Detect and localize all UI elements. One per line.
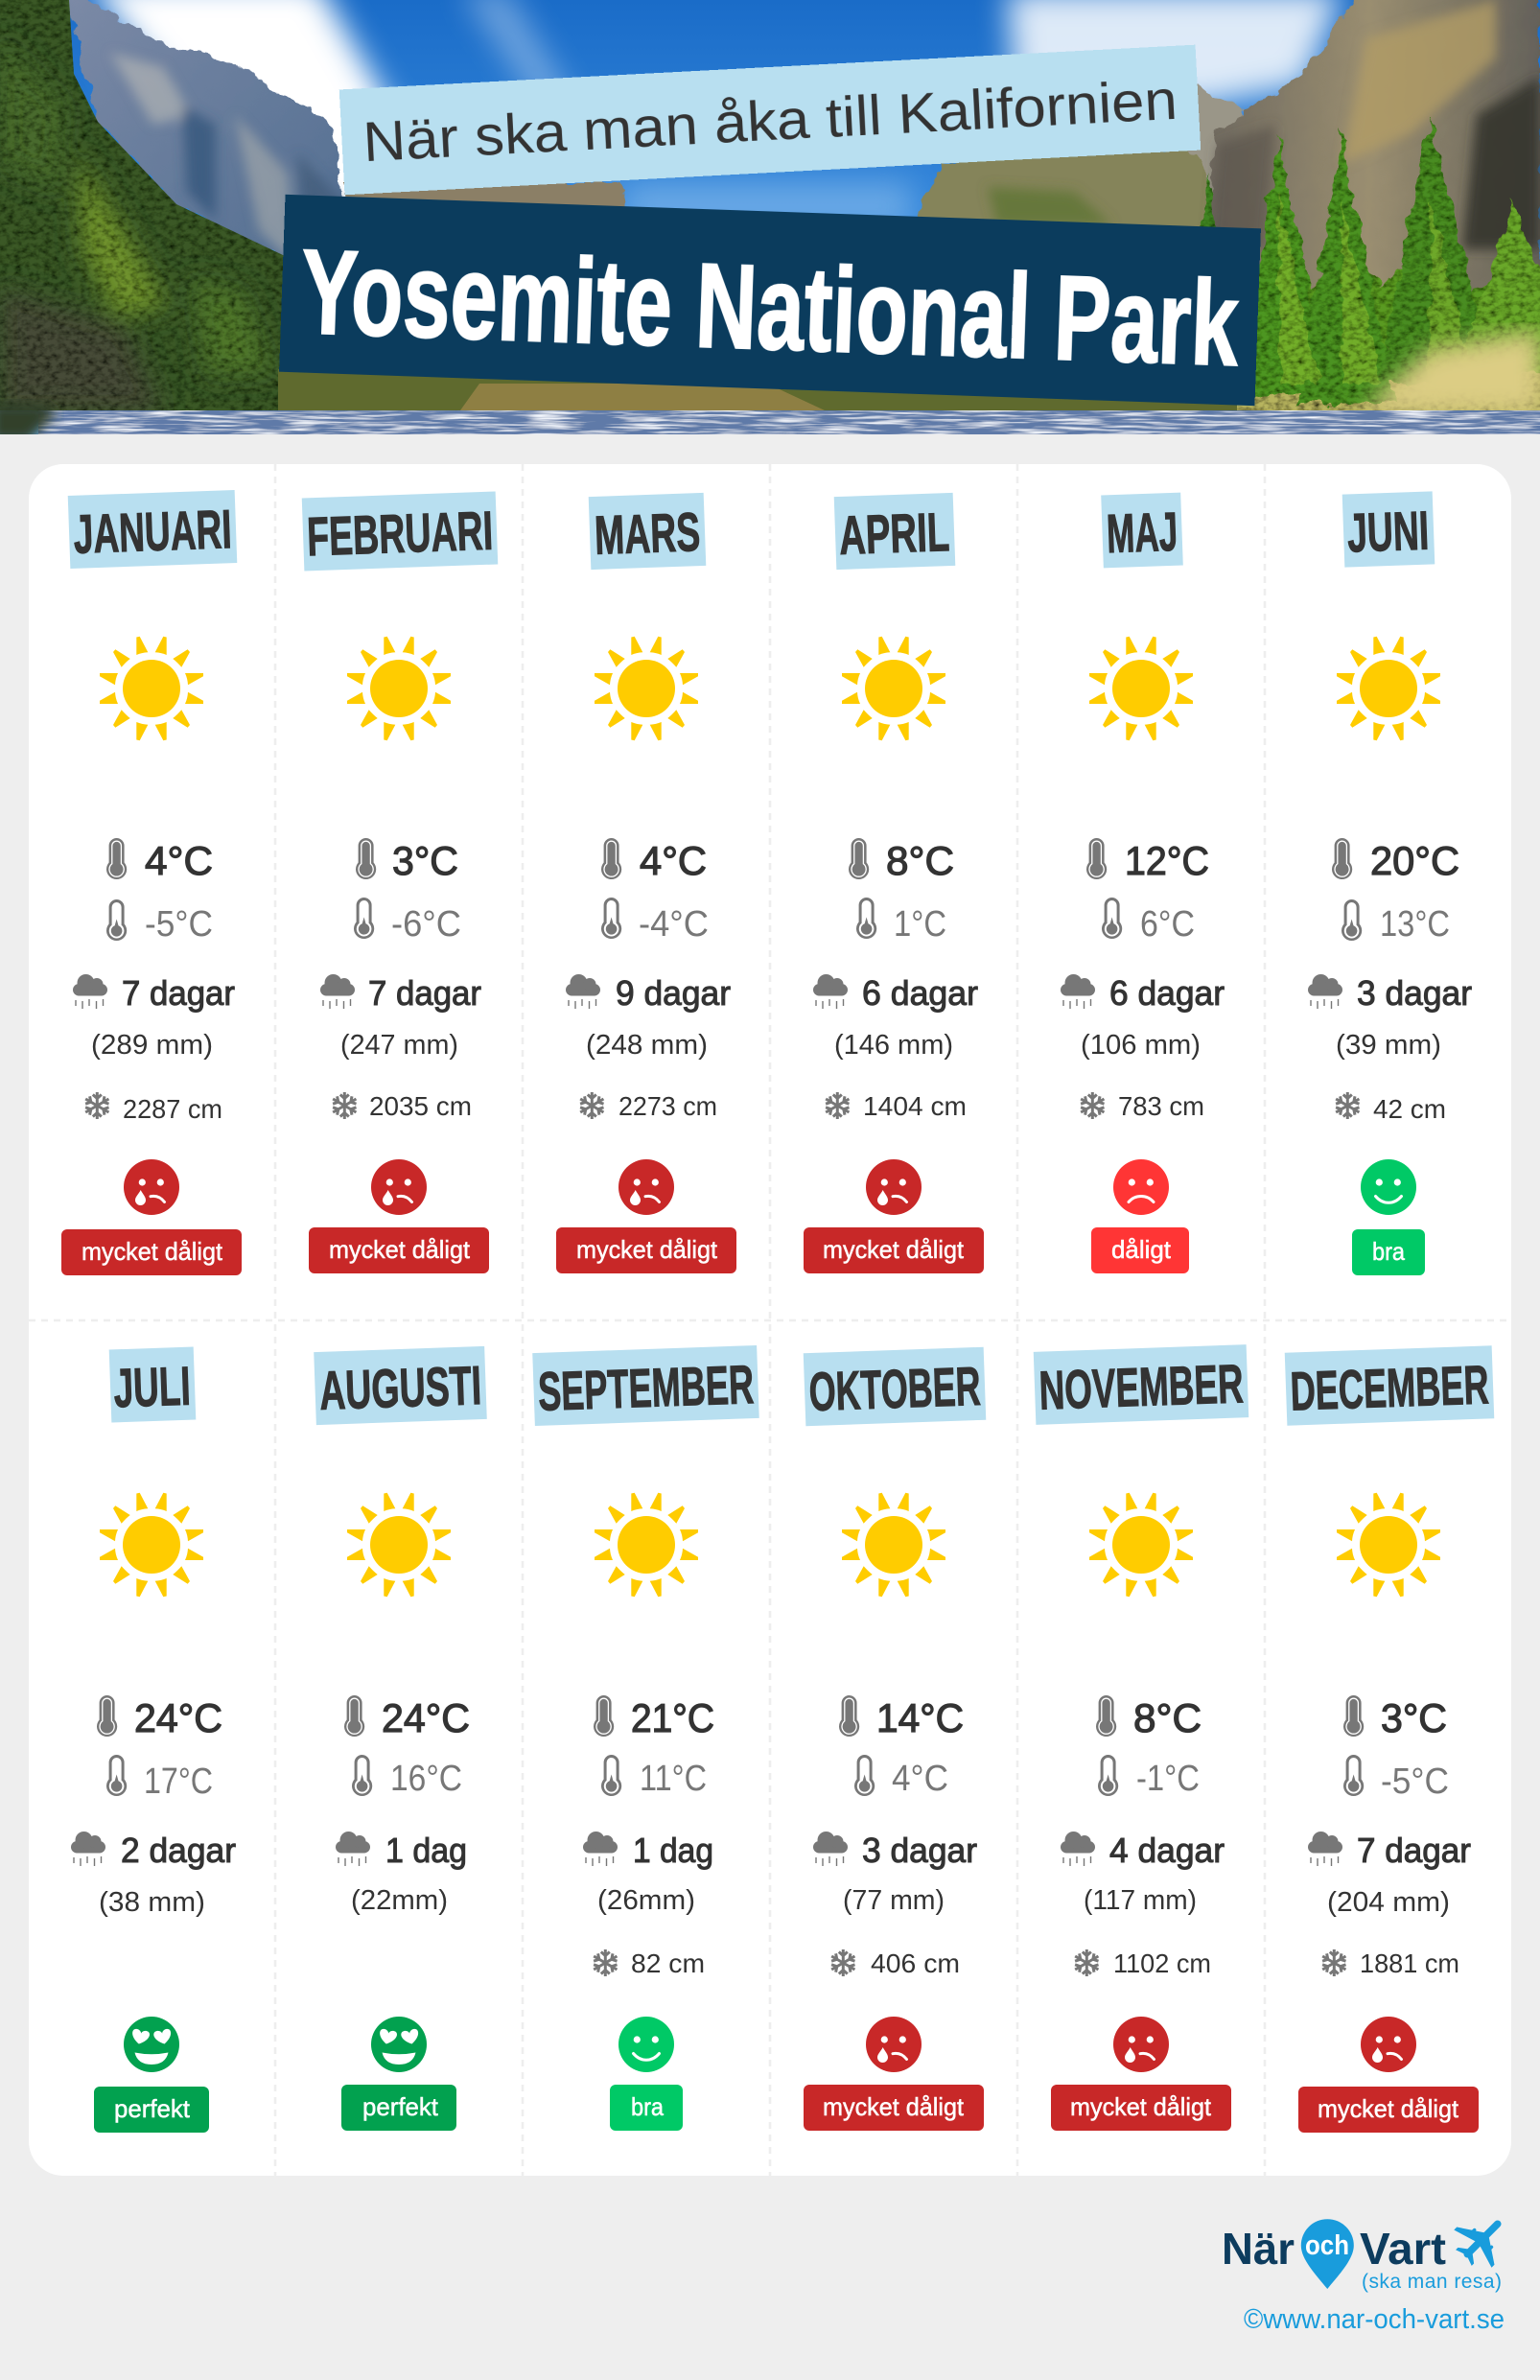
min temperature <box>352 1755 462 1799</box>
logo: När och Vart: När <box>1222 2224 1295 2274</box>
snowfall: 1881 cm <box>1360 1948 1459 1978</box>
snowfall <box>1334 1092 1446 1124</box>
snowfall <box>83 1092 222 1124</box>
logo: När och Vart <box>1222 2203 1519 2293</box>
rating badge <box>1298 2087 1479 2133</box>
month: Oktober <box>804 1347 986 2131</box>
icon: heart-eyes face <box>124 2017 179 2072</box>
rating badge <box>1051 2085 1231 2131</box>
rain days: 6 dagar <box>862 973 978 1013</box>
rating badge <box>341 2085 456 2131</box>
rain days: 7 dagar <box>368 973 481 1013</box>
month label <box>68 490 237 569</box>
month: Juni <box>1308 491 1472 1275</box>
rain days: 3 dagar <box>1357 973 1472 1013</box>
min temperature <box>856 898 946 945</box>
max temperature <box>601 838 707 883</box>
rainfall: (289 mm) <box>91 1030 213 1061</box>
month label: MAJ <box>1106 502 1178 565</box>
title band <box>279 195 1261 406</box>
icon: sun <box>100 637 203 740</box>
rating badge: mycket dåligt <box>823 2092 965 2121</box>
month: Augusti <box>314 1346 487 2131</box>
icon: sad face <box>1113 1159 1169 1215</box>
meadow behind the river <box>278 369 1237 410</box>
month label: APRIL <box>838 502 950 567</box>
snowfall <box>1073 1948 1211 1978</box>
month: Juli <box>71 1346 236 2133</box>
month label <box>1034 1344 1248 1425</box>
rain days <box>71 1831 236 1870</box>
rainfall: (39 mm) <box>1336 1030 1441 1061</box>
month label: JANUARI <box>73 499 233 566</box>
icon: map pin <box>1301 2219 1354 2289</box>
max temperature: 14°C <box>876 1695 964 1740</box>
max temperature <box>849 838 954 883</box>
rain days <box>1061 973 1225 1013</box>
icon: sun <box>842 637 945 740</box>
max temperature <box>594 1695 714 1740</box>
month: Januari <box>61 490 242 1275</box>
max temperature: 8°C <box>886 838 954 883</box>
rating badge <box>1091 1227 1189 1273</box>
min temperature <box>106 899 213 945</box>
rainfall: (77 mm) <box>843 1885 945 1916</box>
snowfall <box>592 1948 705 1978</box>
rain days <box>320 973 481 1013</box>
min temperature <box>106 1755 213 1802</box>
icon: airplane <box>1445 2203 1519 2276</box>
panel: monthly climate table <box>29 464 1511 2176</box>
rainfall: (117 mm) <box>1084 1885 1197 1916</box>
max temperature <box>1096 1695 1202 1740</box>
snowfall <box>829 1948 960 1978</box>
max temperature: 8°C <box>1133 1695 1202 1740</box>
rating badge: mycket dåligt <box>329 1235 471 1264</box>
icon: crying face <box>1113 2017 1169 2072</box>
min temperature: -6°C <box>391 904 461 945</box>
month: Februari <box>302 491 498 1273</box>
month label: MARS <box>594 502 701 567</box>
month label <box>834 493 955 570</box>
rain days <box>1061 1831 1225 1870</box>
rain days <box>583 1831 713 1870</box>
website credit: ©www.nar-och-vart.se <box>1244 2304 1505 2335</box>
max temperature: 4°C <box>145 838 213 883</box>
rain days: 2 dagar <box>121 1831 236 1870</box>
river <box>0 401 1540 434</box>
rating badge <box>804 1227 984 1273</box>
month label <box>532 1345 759 1426</box>
rainfall: (247 mm) <box>340 1030 458 1061</box>
rain days <box>1308 1831 1471 1870</box>
rainfall: (146 mm) <box>834 1030 953 1061</box>
month label <box>589 493 706 570</box>
month label <box>302 491 498 572</box>
rating badge <box>94 2087 209 2133</box>
icon: sun <box>595 1493 698 1597</box>
icon: sun <box>1337 1493 1440 1597</box>
max temperature: 24°C <box>382 1695 470 1740</box>
max temperature: 24°C <box>134 1695 222 1740</box>
month label <box>314 1346 487 1425</box>
month label: SEPTEMBER <box>537 1354 755 1423</box>
icon: crying face <box>618 1159 674 1215</box>
max temperature: 20°C <box>1370 838 1459 883</box>
rain days: 7 dagar <box>122 973 235 1013</box>
month: April <box>804 493 984 1273</box>
icon: crying face <box>124 1159 179 1215</box>
month: November <box>1034 1344 1248 2131</box>
min temperature: -5°C <box>145 904 213 945</box>
rating badge: mycket dåligt <box>1070 2092 1212 2121</box>
rating badge: bra <box>1372 1237 1405 1266</box>
min temperature <box>1102 898 1195 945</box>
rainfall: (204 mm) <box>1327 1887 1450 1918</box>
rainfall: (38 mm) <box>99 1887 205 1918</box>
icon: sun <box>1089 1493 1193 1597</box>
min temperature: -4°C <box>639 904 709 945</box>
logo: När och Vart: Vart <box>1360 2224 1446 2274</box>
min temperature: 16°C <box>390 1759 462 1799</box>
rain days <box>336 1831 467 1870</box>
min temperature: -1°C <box>1136 1759 1200 1799</box>
rain days: 6 dagar <box>1109 973 1225 1013</box>
max temperature: 3°C <box>1381 1695 1447 1740</box>
max temperature <box>97 1695 222 1740</box>
right forest <box>1184 117 1540 414</box>
max temperature <box>356 838 458 883</box>
month label <box>109 1346 196 1423</box>
snowfall: 2273 cm <box>618 1091 717 1121</box>
month label <box>804 1347 986 1426</box>
rating badge: perfekt <box>114 2094 191 2123</box>
rainfall: (248 mm) <box>586 1030 708 1061</box>
snowfall: 2287 cm <box>123 1094 222 1124</box>
snowfall <box>1079 1091 1204 1121</box>
min temperature <box>354 898 461 945</box>
rain days <box>813 1831 977 1870</box>
rating badge <box>61 1229 242 1275</box>
rating badge: perfekt <box>362 2092 439 2121</box>
max temperature <box>106 838 213 883</box>
snowfall: 1102 cm <box>1113 1948 1211 1978</box>
rating badge <box>309 1227 489 1273</box>
month label: NOVEMBER <box>1038 1353 1245 1422</box>
max temperature <box>1332 838 1459 883</box>
month: September <box>532 1345 759 2131</box>
rating badge <box>1352 1229 1425 1275</box>
max temperature: 3°C <box>392 838 458 883</box>
rainfall: (106 mm) <box>1081 1030 1201 1061</box>
snowfall: 1404 cm <box>863 1091 967 1121</box>
max temperature <box>344 1695 470 1740</box>
max temperature <box>839 1695 964 1740</box>
min temperature <box>1098 1755 1200 1799</box>
snowfall: 2035 cm <box>369 1091 472 1121</box>
month label: AUGUSTI <box>318 1355 482 1422</box>
rating badge: bra <box>631 2092 664 2121</box>
max temperature <box>1086 838 1209 883</box>
icon: map pin: och <box>1305 2230 1349 2261</box>
icon: smiling face <box>618 2017 674 2072</box>
max temperature: 4°C <box>640 838 707 883</box>
rain days: 4 dagar <box>1109 1831 1225 1870</box>
rain days <box>813 973 978 1013</box>
rating badge: dåligt <box>1111 1235 1172 1264</box>
header photo: Yosemite valley <box>0 0 1540 441</box>
rainfall: (22mm) <box>351 1885 448 1916</box>
logo: När och Vart: (ska man resa) <box>1362 2271 1502 2293</box>
rain days: 1 dag <box>385 1831 467 1870</box>
subtitle band: När ska man åka till Kalifornien <box>362 69 1178 174</box>
icon: sun <box>595 637 698 740</box>
icon: sun <box>1337 637 1440 740</box>
rating badge <box>556 1227 736 1273</box>
min temperature: 13°C <box>1380 904 1450 945</box>
rating badge <box>804 2085 984 2131</box>
rain days: 3 dagar <box>862 1831 977 1870</box>
icon: crying face <box>371 1159 427 1215</box>
snowfall: 42 cm <box>1373 1094 1446 1124</box>
month label <box>1342 491 1435 568</box>
rating badge: mycket dåligt <box>823 1235 965 1264</box>
rating badge: mycket dåligt <box>576 1235 718 1264</box>
icon: smiling face <box>1361 1159 1416 1215</box>
month: Maj <box>1061 493 1225 1273</box>
icon: sun <box>347 637 451 740</box>
icon: sun <box>347 1493 451 1597</box>
month: December <box>1285 1345 1494 2133</box>
rainfall: (26mm) <box>597 1885 695 1916</box>
min temperature <box>601 898 709 945</box>
icon: crying face <box>866 2017 922 2072</box>
min temperature: -5°C <box>1381 1762 1449 1802</box>
month: Mars <box>556 493 736 1273</box>
icon: sun <box>1089 637 1193 740</box>
min temperature: 1°C <box>894 904 946 945</box>
min temperature: 11°C <box>640 1759 707 1799</box>
month label: OKTOBER <box>808 1356 982 1423</box>
snowfall: 406 cm <box>871 1948 960 1978</box>
min temperature <box>854 1755 948 1799</box>
snowfall <box>578 1091 717 1121</box>
min temperature: 4°C <box>892 1759 948 1799</box>
month label: JULI <box>113 1356 192 1419</box>
min temperature: 17°C <box>144 1762 213 1802</box>
min temperature <box>1343 1755 1449 1802</box>
snowfall: 82 cm <box>631 1948 705 1978</box>
rating badge <box>610 2085 683 2131</box>
max temperature: 21°C <box>631 1695 714 1740</box>
icon: sun <box>842 1493 945 1597</box>
rain days <box>566 973 731 1013</box>
left forest <box>0 0 284 412</box>
rain days: 1 dag <box>633 1831 713 1870</box>
rain days <box>73 973 235 1013</box>
month label: JUNI <box>1346 501 1430 564</box>
rating badge: mycket dåligt <box>82 1237 223 1266</box>
subtitle band <box>339 45 1201 195</box>
rating badge: mycket dåligt <box>1318 2094 1459 2123</box>
rain days <box>1308 973 1472 1013</box>
min temperature: 6°C <box>1140 904 1195 945</box>
max temperature <box>1343 1695 1447 1740</box>
max temperature: 12°C <box>1125 838 1209 883</box>
month label <box>1101 493 1183 568</box>
rain days: 7 dagar <box>1357 1831 1471 1870</box>
icon: crying face <box>866 1159 922 1215</box>
min temperature <box>601 1755 707 1799</box>
icon: heart-eyes face <box>371 2017 427 2072</box>
snowfall: 783 cm <box>1118 1091 1204 1121</box>
icon: crying face <box>1361 2017 1416 2072</box>
rain days: 9 dagar <box>616 973 731 1013</box>
min temperature <box>1342 899 1450 945</box>
month label: FEBRUARI <box>306 501 494 568</box>
icon: sun <box>100 1493 203 1597</box>
